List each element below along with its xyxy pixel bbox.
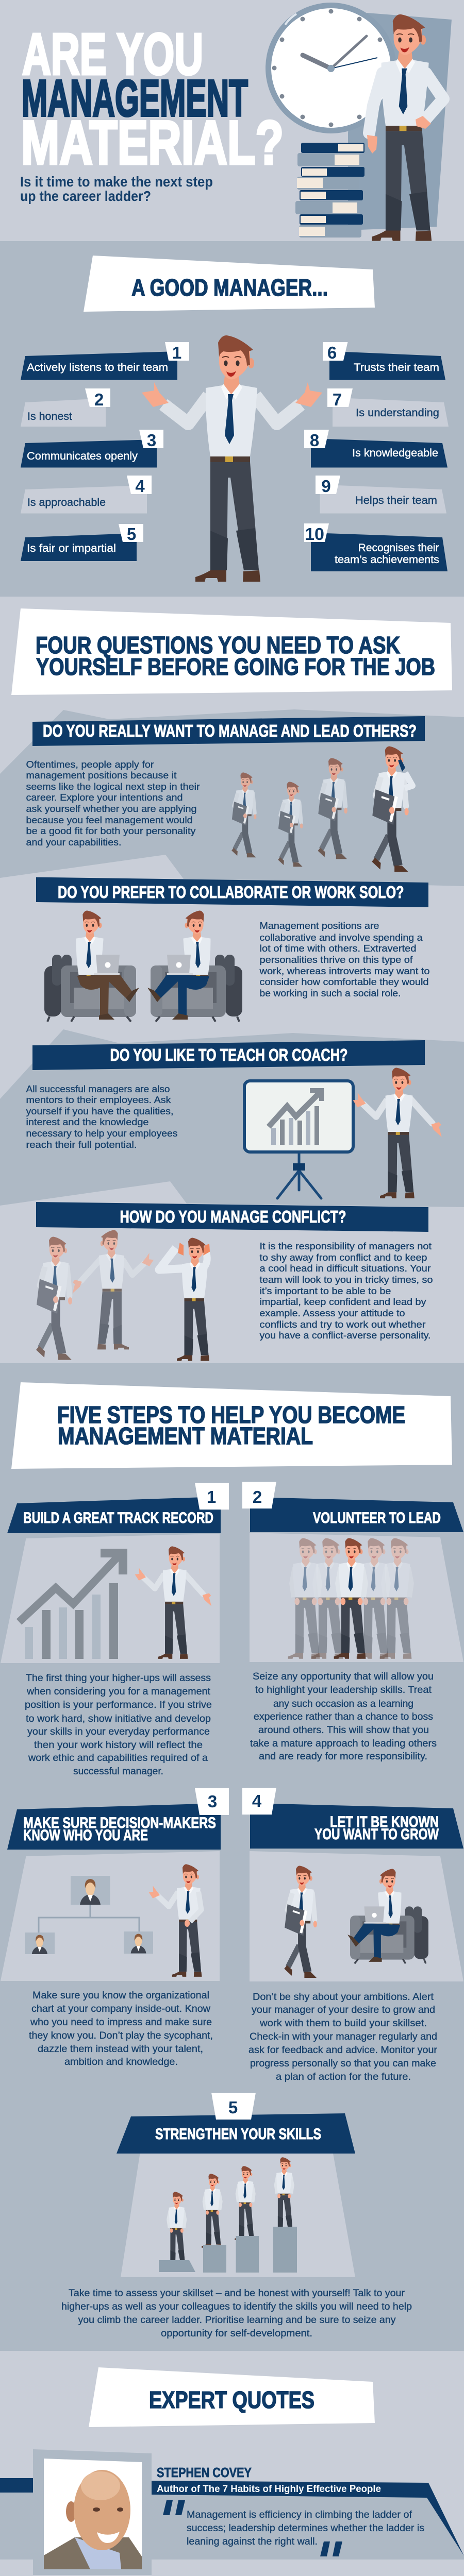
quote text: success; leadership determines whether the ladder is [187,2523,424,2534]
trait 3: 3 [147,431,156,450]
question 3 text [26,1084,177,1150]
figures: line of managers [288,1538,411,1659]
trait 2: 2 [94,390,104,409]
step 2 text: Seize any opportunity that will allow you [253,1671,434,1682]
step 1 text [25,1673,212,1777]
panel: step 1: BUILD A GREAT TRACK RECORD [23,1510,213,1527]
trait 8: Is knowledgeable [352,447,438,459]
figure: hero manager [367,14,443,241]
trait 6: 6 [327,343,337,362]
trait 1: 1 [172,343,181,362]
panel: question 3 [0,1029,464,1207]
step 2 text: experience rather than a chance to boss [254,1711,433,1722]
figure: presenting manager [135,1546,211,1659]
panel: question 2 [36,877,430,1022]
heading: five steps [11,1382,452,1469]
panel: step 3: MAKE SURE DECISION-MAKERS [23,1815,216,1832]
trait 9 [316,476,446,513]
question 2 text: lot of time with others. Extraverted [260,943,417,954]
question 1 text: Oftentimes, people apply for [26,759,154,770]
quote: Stephen Covey [0,2449,464,2575]
question 2 text [259,921,430,998]
heading: five steps: MANAGEMENT MATERIAL [58,1422,313,1449]
trait 10: Recognises their [358,542,439,554]
step 3 text: chart at your company inside-out. Know [31,2004,210,2014]
figures: managers on rising blocks [159,2157,297,2273]
question 3 text: All successful managers are also [26,1084,170,1094]
trait 6: Trusts their team [354,362,439,374]
panel: step 5: STRENGTHEN YOUR SKILLS [155,2126,321,2143]
subtitle [20,174,213,204]
question 4 text: conflicts and try to work out whether [260,1319,426,1330]
trait 9: 9 [321,477,331,496]
question 1 text: ask yourself whether you are applying [26,804,197,814]
step 1 text: successful manager. [73,1766,163,1777]
hero background shape [348,13,452,230]
step 3 text: who you need to impress and make sure [30,2017,212,2028]
panel: step 4: LET IT BE KNOWN [330,1814,439,1831]
panel: step 3 [1,1788,229,2067]
icon: wall clock [266,3,396,133]
quote text: leaning against the right wall. [187,2536,318,2547]
subtitle: Is it time to make the next step [20,174,213,190]
step 5 text: opportunity for self-development. [161,2328,312,2339]
heading: a good manager [84,256,375,312]
figures: growing managers [231,746,412,872]
step 3 text: ambition and knowledge. [64,2057,178,2067]
step 4 text: your manager of your desire to grow and [252,2005,435,2015]
trait 9: Helps their team [355,495,437,506]
title [21,22,284,177]
step 4 text: progress personally so that you can make [250,2058,436,2069]
trait 2: Is honest [27,411,72,422]
step 4 text: Check-in with your manager regularly and [250,2031,437,2042]
step 4 text [248,1992,438,2082]
question 3 band: DO YOU LIKE TO TEACH OR COACH? [110,1045,347,1064]
question 2 text: collaborative and involve spending a [260,933,423,943]
question 4 text: impartial, keep confident and lead by [260,1297,426,1307]
panel: step 2 [242,1482,463,1762]
panel: step 4: 4 [252,1791,262,1810]
question 4 text: you have a conflict-averse personality. [260,1330,431,1341]
step 1 text: to work hard, show initiative and develop [26,1714,211,1724]
question 1 text: seems like the logical next step in their [26,782,200,792]
panel: step 4 [242,1788,463,2082]
step 3 text [29,1990,213,2067]
step 4 text: work with them to build your skillset. [259,2018,427,2029]
trait 4: 4 [135,477,145,496]
trait 4: Is approachable [27,497,106,509]
trait 10: team’s achievements [335,554,439,566]
trait 1: Actively listens to their team [27,362,168,374]
trait 8 [304,430,448,468]
question 2 text: personalities thrive on this type of [260,955,413,965]
question 4 text: It is the responsibility of managers not [260,1241,432,1251]
trait 3: Communicates openly [27,450,138,462]
step 3 text: Make sure you know the organizational [32,1990,209,2001]
figure: manager [149,1864,202,1977]
question 2 band [36,877,428,907]
question 1 text: because you feel management would [26,815,193,825]
question 1 text [26,759,200,848]
title: MANAGEMENT [22,70,248,127]
question 1 text: and your capabilities. [26,837,122,848]
question 3 text: necessary to help your employees [26,1128,177,1139]
panel: step 3: KNOW WHO YOU ARE [23,1827,148,1844]
question 2 text: consider how comfortable they would [260,977,429,987]
trait 5: Is fair or impartial [27,543,116,554]
trait 10 [304,523,448,571]
name and role [157,2465,381,2495]
step 2 text [250,1671,437,1762]
step 2 text: any such occasion as a learning [273,1699,413,1709]
trait 7: Is understanding [356,407,439,419]
step 4 text: a plan of action for the future. [276,2072,411,2082]
question 2 text: Management positions are [260,921,379,931]
heading: a good manager: A GOOD MANAGER... [131,274,328,301]
panel: question 4 [36,1202,433,1361]
question 3 text: mentors to their employees. Ask [26,1095,172,1105]
step 4 text: ask for feedback and advice. Monitor your [248,2045,438,2056]
title: MATERIAL? [21,108,284,177]
heading: four questions [11,608,452,695]
name and role: STEPHEN COVEY [157,2465,252,2480]
figures: seated managers [44,910,242,1022]
chart: organization chart [25,1876,153,1954]
question 4 text: it’s important to be able to be [260,1286,391,1296]
step 2 text: take a mature approach to leading others [250,1738,437,1749]
panel: step 3: 3 [208,1792,217,1811]
step 3 text: they know you. Don’t play the sycophant, [29,2030,213,2041]
icon: book stack [295,143,364,238]
trait 7: 7 [333,390,342,409]
panel: step 1: 1 [207,1487,216,1506]
step 5 text: you climb the career ladder. Prioritise learning and be sure to seize any [78,2315,396,2326]
step 3 text: dazzle them instead with your talent, [38,2044,203,2055]
quote text: Management is efficiency in climbing the ladder of [187,2510,412,2520]
heading: expert quotes [89,2367,375,2427]
subtitle: up the career ladder? [20,188,151,204]
panel: step 5: 5 [228,2098,238,2117]
question 4 band [36,1202,428,1232]
panel: step 5 [61,2093,412,2339]
question 2 text: be working in such a social role. [260,988,401,998]
question 3 text: reach their full potential. [26,1140,137,1150]
panel: question 1 [0,709,464,886]
step 1 text: then your work history will reflect the [34,1740,203,1751]
trait 1 [21,342,189,380]
trait 7 [327,388,449,427]
heading: four questions: FOUR QUESTIONS YOU NEED TO ASK [36,632,400,658]
panel: step 2: 2 [253,1487,262,1506]
question 2 text: work, whereas introverts may want to [259,966,430,976]
question 4 text [260,1241,433,1341]
name and role: Author of The 7 Habits of Highly Effective People [157,2484,381,2495]
step 1 text: work ethic and capabilities required of a [28,1753,208,1764]
step 2 text: to highlight your leadership skills. Treat [255,1685,432,1696]
question 1 band [32,716,425,746]
title: ARE YOU [22,22,203,87]
trait 4 [21,476,152,513]
question 4 text: a cool head in difficult situations. Your [260,1263,431,1274]
quote text [163,2500,424,2556]
question 1 text: management positions because it [26,770,176,781]
chart: rising bars and arrow [19,1549,127,1659]
question 4 text: team will look to you in tricky times, so [260,1275,433,1285]
figures: conflict scene [36,1230,210,1361]
question 4 text: to shy away from conflict and to keep [260,1252,427,1263]
step 2 text: and are ready for more responsibility. [259,1751,427,1762]
trait 5: 5 [127,524,136,544]
step 5 text: higher-ups as well as your colleagues to identify the skills you will need to help [61,2301,412,2312]
panel: step 1 [1,1483,229,1777]
figure: presenting manager [353,1067,442,1198]
step 5 text [61,2288,412,2339]
heading: expert quotes: EXPERT QUOTES [149,2386,314,2413]
question 4 text: example. Assess your attitude to [260,1308,405,1318]
step 1 text: position is your performance. If you strive [25,1700,212,1710]
question 3 band [32,1040,425,1070]
step 5 text: Take time to assess your skillset – and be honest with yourself! Talk to your [69,2288,405,2299]
step 1 text: when considering you for a management [26,1686,211,1697]
step 1 text: The first thing your higher-ups will assess [26,1673,211,1684]
trait 6 [323,342,445,380]
heading: five steps: FIVE STEPS TO HELP YOU BECOME [57,1401,405,1428]
question 3 text: interest and the knowledge [26,1117,148,1127]
step 2 text: around others. This will show that you [258,1725,429,1736]
trait 10: 10 [305,524,324,544]
icon: presentation board [244,1081,353,1198]
trait 8: 8 [310,431,319,450]
question 4 band: HOW DO YOU MANAGE CONFLICT? [120,1207,346,1226]
question 3 text: yourself if you have the qualities, [26,1106,173,1116]
question 1 text: be a good fit for both your personality [26,826,196,836]
trait 2 [21,388,110,427]
portrait: Stephen Covey [33,2449,152,2575]
step 1 text: your skills in your everyday performance [27,1726,210,1737]
trait 5 [21,524,143,561]
trait 3 [21,430,163,468]
step 4 text: Don’t be shy about your ambitions. Alert [253,1992,434,2003]
figure: manager with open arms [142,335,322,582]
question 1 text: career. Explore your intentions and [26,792,183,803]
figures: manager and seated employee [284,1866,428,1978]
